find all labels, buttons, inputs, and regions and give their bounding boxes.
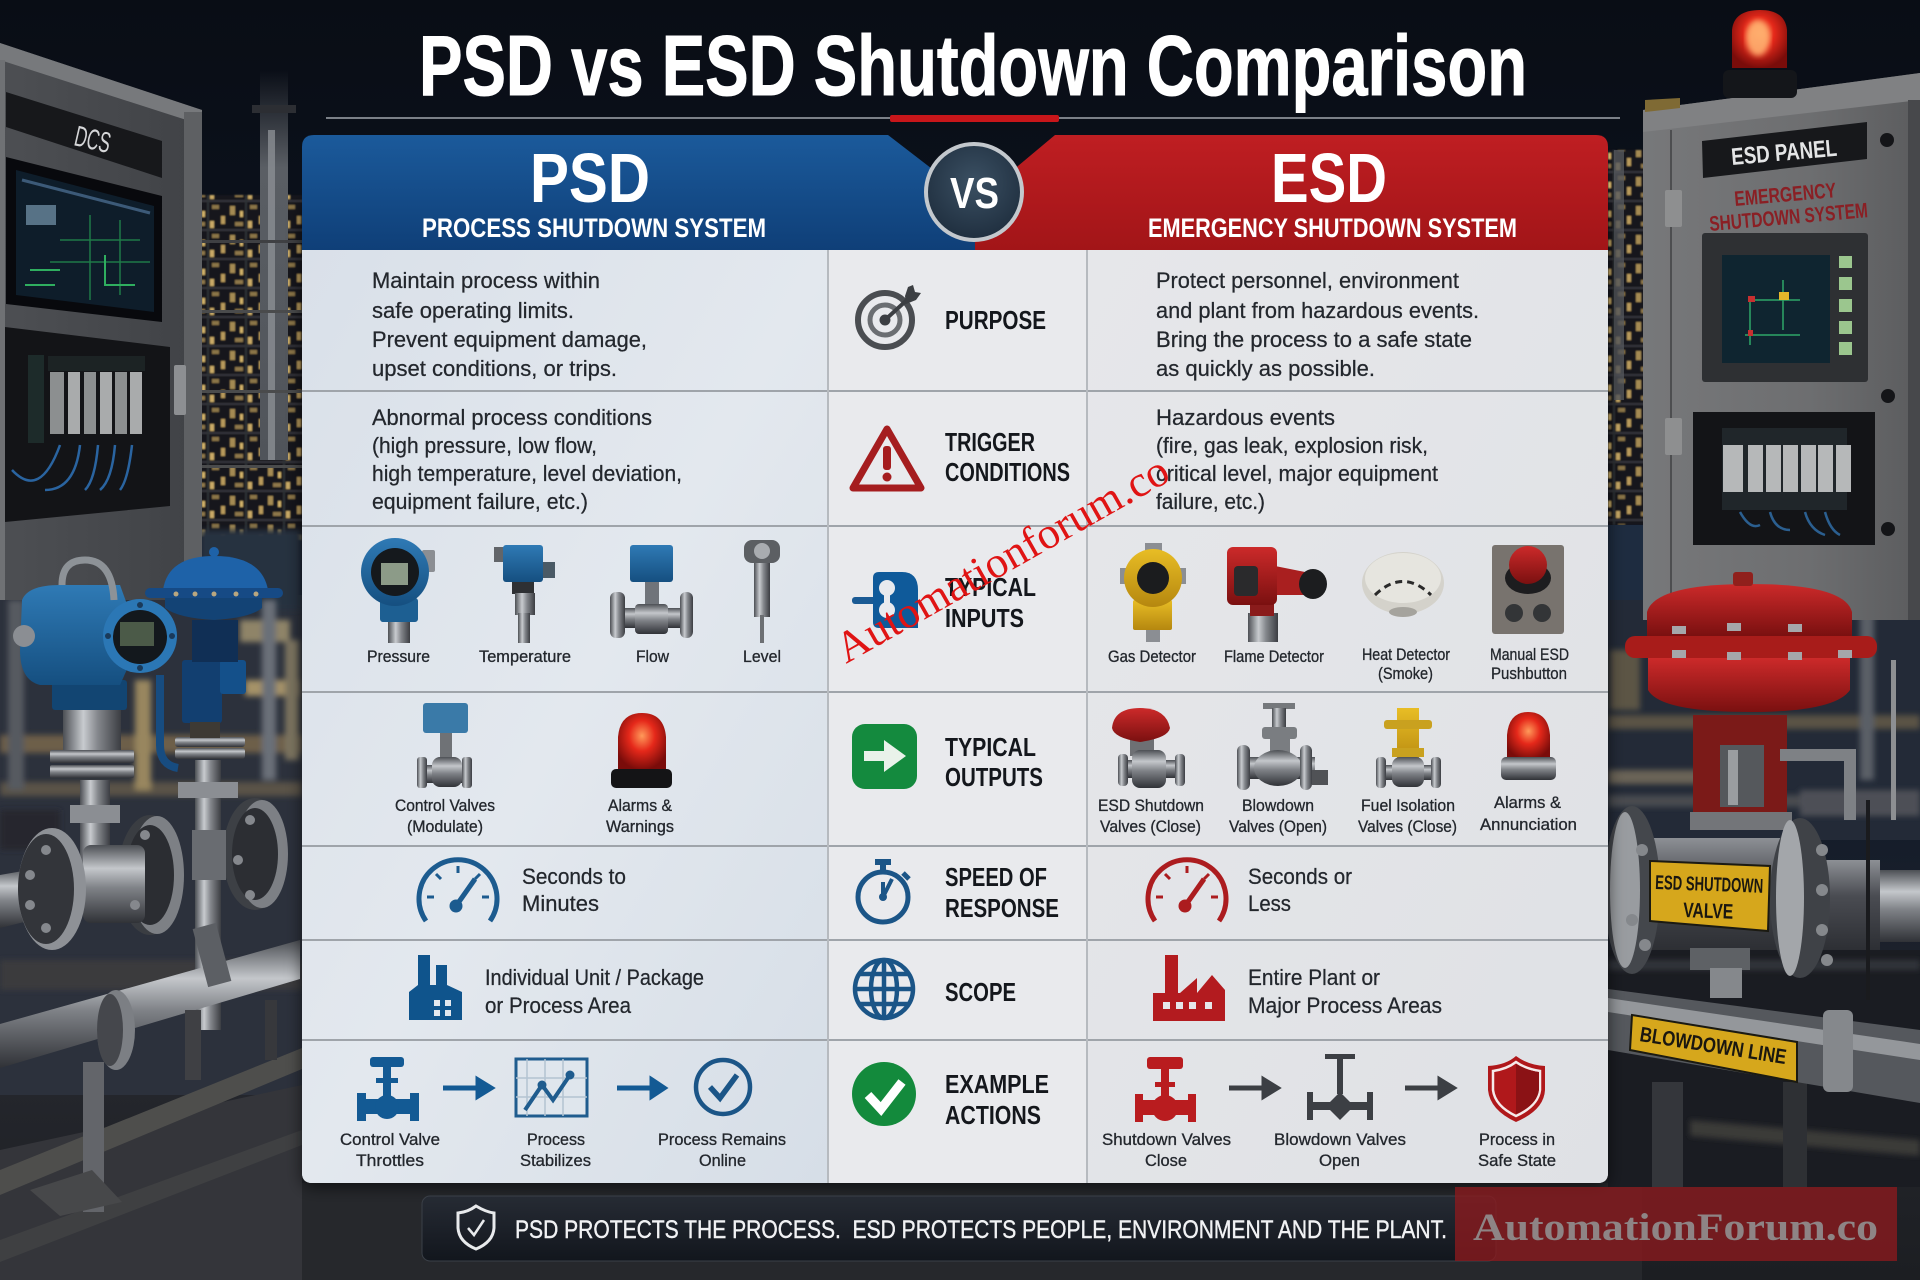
label: PSD step labels <box>340 1131 786 1170</box>
text: ESD purpose: Bring the process to a safe state <box>1156 327 1472 352</box>
background: left refinery at night <box>200 70 305 540</box>
text: PSD purpose: Maintain process within <box>372 268 600 293</box>
text: PSD purpose: upset conditions, or trips. <box>372 356 617 381</box>
arrow: PSD step 1 <box>443 1080 491 1096</box>
label: gas detector: Gas Detector <box>1108 648 1196 666</box>
label: ESD step labels: Safe State <box>1478 1152 1556 1170</box>
text: PSD trigger conditions: (high pressure, low flow, <box>372 433 597 458</box>
icon: pressure transmitter <box>361 538 435 643</box>
illustration: red beacon on ESD panel <box>1723 10 1797 98</box>
label: PSD step labels: Throttles <box>356 1152 424 1170</box>
icon: blue throttle valve <box>357 1057 419 1121</box>
label: alarms and warnings <box>606 797 674 836</box>
label: heat detector smoke: Heat Detector <box>1362 646 1450 664</box>
text: seconds to minutes <box>522 864 626 916</box>
icon: red gauge <box>1148 860 1226 921</box>
label: PSD step labels: Control Valve <box>340 1131 440 1149</box>
label: flow: Flow <box>636 648 669 666</box>
ESD heading: ESD <box>1271 139 1387 217</box>
label: control valves: Control Valves <box>395 797 495 815</box>
label: speed of response <box>945 862 1059 923</box>
label: PSD step labels: Online <box>699 1152 746 1170</box>
PSD heading: PSD <box>530 139 650 217</box>
text: seconds or less: Seconds or <box>1248 864 1352 889</box>
text: seconds or less <box>1248 864 1352 916</box>
title: PSD vs ESD Shutdown Comparison <box>419 19 1527 114</box>
label: fuel isolation valves: Fuel Isolation <box>1361 797 1455 815</box>
label: ESD step labels: Blowdown Valves <box>1274 1131 1406 1149</box>
label: manual ESD pushbutton: Pushbutton <box>1491 665 1567 683</box>
label: pressure: Pressure <box>367 648 430 666</box>
label: blowdown valves <box>1229 797 1327 836</box>
label: fuel isolation valves <box>1358 797 1457 836</box>
label: PSD step labels: Process <box>527 1131 585 1149</box>
icon: blue plant <box>409 955 462 1020</box>
icon: alarm beacon <box>611 713 672 788</box>
background: left pipework blur <box>0 530 302 1095</box>
icon: target <box>858 285 921 347</box>
text: ESD trigger conditions: critical level, major equipment <box>1156 461 1438 486</box>
sign: blowdown line <box>1630 1015 1797 1082</box>
icon: alarm annunciator <box>1501 712 1556 780</box>
label: trigger conditions <box>945 427 1070 487</box>
label: typical outputs <box>945 732 1043 792</box>
watermark: diagonal red text: Automationforum.co <box>827 445 1177 673</box>
icon: red shutdown valve <box>1135 1057 1196 1122</box>
illustration: red ESD shutdown valve <box>1604 572 1920 1000</box>
label: purpose: PURPOSE <box>945 305 1046 335</box>
icon: heat and smoke detector <box>1362 552 1444 617</box>
icon: level transmitter <box>744 540 780 643</box>
VS text: VS <box>950 169 999 218</box>
label: typical inputs: INPUTS <box>945 603 1024 633</box>
label: alarms and warnings: Warnings <box>606 818 674 836</box>
icon: manual pushbutton <box>1492 545 1564 634</box>
text: PSD trigger conditions: equipment failure, etc.) <box>372 489 588 514</box>
VS badge <box>926 144 1022 240</box>
label: ESD step labels: Process in <box>1479 1131 1555 1149</box>
label: alarms and annunciation: Alarms & <box>1494 794 1561 812</box>
label: heat detector smoke <box>1362 646 1450 683</box>
label: manual ESD pushbutton: Manual ESD <box>1490 646 1569 664</box>
text: PSD trigger conditions <box>372 405 682 514</box>
icon: green check <box>852 1062 916 1126</box>
label: example actions: ACTIONS <box>945 1100 1041 1130</box>
text: ESD trigger conditions <box>1156 405 1438 514</box>
label: manual ESD pushbutton <box>1490 646 1569 683</box>
background: right pipework blur <box>1608 600 1920 1187</box>
illustration: blue transmitter <box>13 560 177 890</box>
column: ESD background <box>1087 250 1608 1183</box>
label: speed of response: SPEED OF <box>945 862 1047 892</box>
text: ESD trigger conditions: Hazardous events <box>1156 405 1335 430</box>
text: seconds to minutes: Seconds to <box>522 864 626 889</box>
label: blowdown valves: Blowdown <box>1242 797 1314 815</box>
arrow: ESD step 2 <box>1405 1080 1453 1096</box>
icon: control valve <box>417 703 472 788</box>
DCS name plate <box>6 92 162 178</box>
label: trigger conditions: TRIGGER <box>945 427 1035 457</box>
label: flame detector: Flame Detector <box>1224 648 1324 666</box>
icon: stopwatch <box>858 859 909 922</box>
icon: dark blowdown valve <box>1307 1054 1373 1120</box>
label: example actions <box>945 1069 1049 1130</box>
text: entire plant: Major Process Areas <box>1248 993 1442 1018</box>
sign text line 1: ESD SHUTDOWN <box>1655 872 1764 898</box>
text: individual unit <box>485 965 704 1018</box>
label: PSD step labels: Process Remains <box>658 1131 786 1149</box>
label: typical outputs: OUTPUTS <box>945 762 1043 792</box>
text: entire plant <box>1248 965 1442 1018</box>
sign: ESD shutdown valve <box>1650 861 1770 931</box>
panel: ESD cabinet <box>1643 73 1920 620</box>
icon: warning triangle <box>853 429 921 488</box>
hinge lower <box>1665 418 1682 455</box>
text: ESD purpose: and plant from hazardous events. <box>1156 298 1479 323</box>
label: temperature: Temperature <box>479 648 571 666</box>
text: individual unit: or Process Area <box>485 993 632 1018</box>
label: ESD step labels <box>1102 1131 1556 1170</box>
text: seconds or less: Less <box>1248 891 1291 916</box>
sign text: BLOWDOWN LINE <box>1638 1023 1788 1069</box>
PSD subheading: PROCESS SHUTDOWN SYSTEM <box>422 213 766 243</box>
label: trigger conditions: CONDITIONS <box>945 457 1070 487</box>
label: level: Level <box>743 648 781 666</box>
label: ESD shutdown valves <box>1098 797 1204 836</box>
icon: typical outputs arrow <box>852 724 917 789</box>
header: ESD <box>975 135 1608 250</box>
label: alarms and warnings: Alarms & <box>608 797 672 815</box>
column: category background <box>828 250 1087 1183</box>
banner text: PSD PROTECTS THE PROCESS. ESD PROTECTS PEOPLE, ENVIRONMENT AND THE PLANT. <box>515 1216 1447 1244</box>
label: typical inputs <box>945 572 1036 633</box>
SHUTDOWN SYSTEM label: SHUTDOWN SYSTEM <box>1708 199 1869 236</box>
ESD subheading: EMERGENCY SHUTDOWN SYSTEM <box>1148 213 1517 243</box>
ESD I/O rack <box>1693 412 1875 545</box>
text: PSD trigger conditions: Abnormal process conditions <box>372 405 652 430</box>
text: ESD purpose <box>1156 268 1479 381</box>
text: ESD purpose: Protect personnel, environment <box>1156 268 1459 293</box>
DCS I/O rack <box>5 327 170 522</box>
label: PSD step labels: Stabilizes <box>520 1152 591 1170</box>
illustration: lower right pipe <box>1608 989 1920 1187</box>
text: PSD purpose <box>372 268 647 381</box>
icon: gas detector <box>1120 543 1186 642</box>
label: typical outputs: TYPICAL <box>945 732 1036 762</box>
label: alarms and annunciation: Annunciation <box>1480 816 1577 834</box>
label: typical inputs: TYPICAL <box>945 572 1036 602</box>
arrow: ESD step 1 <box>1229 1080 1277 1096</box>
icon: red plant <box>1153 955 1225 1021</box>
text: PSD trigger conditions: high temperature, level deviation, <box>372 461 682 486</box>
label: ESD step labels: Shutdown Valves <box>1102 1131 1231 1149</box>
icon: typical inputs <box>852 572 918 628</box>
icon: safe state shield <box>1488 1056 1545 1122</box>
icon: flow meter <box>610 545 693 638</box>
label: speed of response: RESPONSE <box>945 893 1059 923</box>
hinge upper <box>1665 190 1682 227</box>
label: alarms and annunciation <box>1480 794 1577 834</box>
icon: globe <box>855 960 913 1018</box>
row dividers <box>302 250 1608 1183</box>
DCS plate label: DCS <box>71 121 114 160</box>
label: control valves <box>395 797 495 836</box>
text: ESD trigger conditions: failure, etc.) <box>1156 489 1265 514</box>
ESD HMI screen <box>1702 233 1868 382</box>
icon: ESD shutdown valve <box>1112 708 1185 788</box>
label: ESD shutdown valves: Valves (Close) <box>1100 818 1201 836</box>
panel: DCS cabinet <box>0 43 202 600</box>
label: scope: SCOPE <box>945 977 1016 1007</box>
column: PSD background <box>302 250 828 1183</box>
ESD PANEL label: ESD PANEL <box>1730 135 1838 171</box>
label: example actions: EXAMPLE <box>945 1069 1049 1099</box>
icon: blowdown valve <box>1237 703 1328 790</box>
watermark: AutomationForum.co box <box>1455 1187 1897 1261</box>
text: individual unit: Individual Unit / Package <box>485 965 704 990</box>
icon: blue gauge <box>419 860 497 921</box>
header: PSD <box>302 135 975 250</box>
text: entire plant: Entire Plant or <box>1248 965 1380 990</box>
title underline <box>326 115 1620 122</box>
illustration: blue actuator valve <box>145 547 283 1030</box>
DCS HMI screen <box>6 157 162 322</box>
label: ESD shutdown valves: ESD Shutdown <box>1098 797 1204 815</box>
label: fuel isolation valves: Valves (Close) <box>1358 818 1457 836</box>
sign text line 2: VALVE <box>1683 899 1734 924</box>
background: center floor <box>302 1183 1642 1280</box>
cabinet bolts <box>1880 133 1895 536</box>
icon: flame detector <box>1227 547 1327 642</box>
arrow: PSD step 2 <box>617 1080 664 1096</box>
background: left floor and supports <box>0 1000 302 1280</box>
watermark box text: AutomationForum.co <box>1473 1206 1878 1249</box>
label: control valves: (Modulate) <box>407 818 483 836</box>
illustration: left flanged pipes and valve body <box>0 798 300 1070</box>
label: ESD step labels: Open <box>1319 1152 1360 1170</box>
icon: fuel isolation valve <box>1376 708 1441 788</box>
text: ESD trigger conditions: (fire, gas leak, explosion risk, <box>1156 433 1428 458</box>
banner: key takeaway <box>422 1196 1496 1261</box>
background: right refinery <box>1608 150 1648 645</box>
panel: comparison table <box>302 200 1608 1183</box>
label: heat detector smoke: (Smoke) <box>1378 665 1433 683</box>
ESD PANEL name plate <box>1702 122 1867 178</box>
icon: stabilising chart <box>516 1059 587 1116</box>
label: blowdown valves: Valves (Open) <box>1229 818 1327 836</box>
icon: temperature transmitter <box>494 545 555 643</box>
text: ESD purpose: as quickly as possible. <box>1156 356 1375 381</box>
text: seconds to minutes: Minutes <box>522 891 599 916</box>
EMERGENCY label: EMERGENCY <box>1733 179 1837 211</box>
icon: banner shield <box>458 1206 494 1249</box>
text: PSD purpose: safe operating limits. <box>372 298 574 323</box>
label: ESD step labels: Close <box>1145 1152 1187 1170</box>
icon: process online check <box>696 1060 750 1114</box>
text: PSD purpose: Prevent equipment damage, <box>372 327 647 352</box>
